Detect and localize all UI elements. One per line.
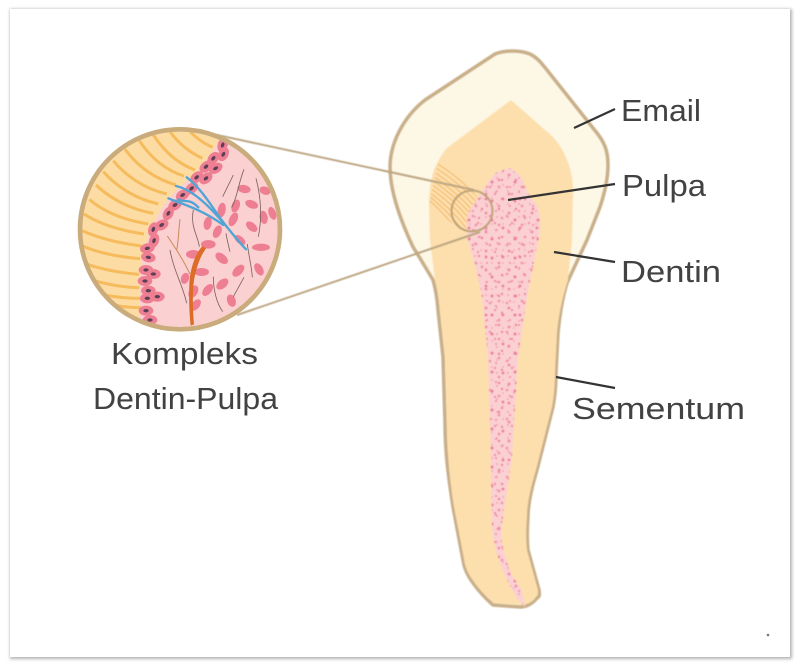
blue nerve fibres	[168, 177, 246, 249]
fibroblast cells	[179, 184, 278, 313]
dentin stripes	[80, 132, 213, 308]
connector lines	[217, 135, 480, 315]
magnifier small circle	[452, 190, 492, 232]
leader lines	[508, 109, 615, 388]
tooth	[390, 51, 608, 610]
label: Pulpa: Pulpa	[622, 168, 707, 203]
orange blood vessel	[189, 246, 206, 326]
label: Kompleks: Kompleks	[111, 336, 258, 371]
pulp	[466, 168, 540, 607]
infographic: tooth anatomy	[78, 48, 770, 636]
dentin region	[82, 132, 219, 318]
label: Sementum: Sementum	[572, 391, 745, 426]
thin fibres	[170, 169, 261, 312]
dentin	[429, 100, 573, 605]
label: Dentin-Pulpa: Dentin-Pulpa	[93, 381, 279, 416]
small speck	[767, 634, 769, 636]
enamel crown and root outline	[390, 51, 608, 607]
label: Email: Email	[621, 93, 701, 128]
odontoblast cells	[138, 136, 231, 325]
thin vessels	[167, 219, 190, 274]
magnified circle: dentin-pulp complex	[70, 120, 280, 333]
circle border	[80, 129, 280, 329]
tubules in dentin	[430, 164, 478, 228]
label: Dentin: Dentin	[621, 254, 721, 289]
